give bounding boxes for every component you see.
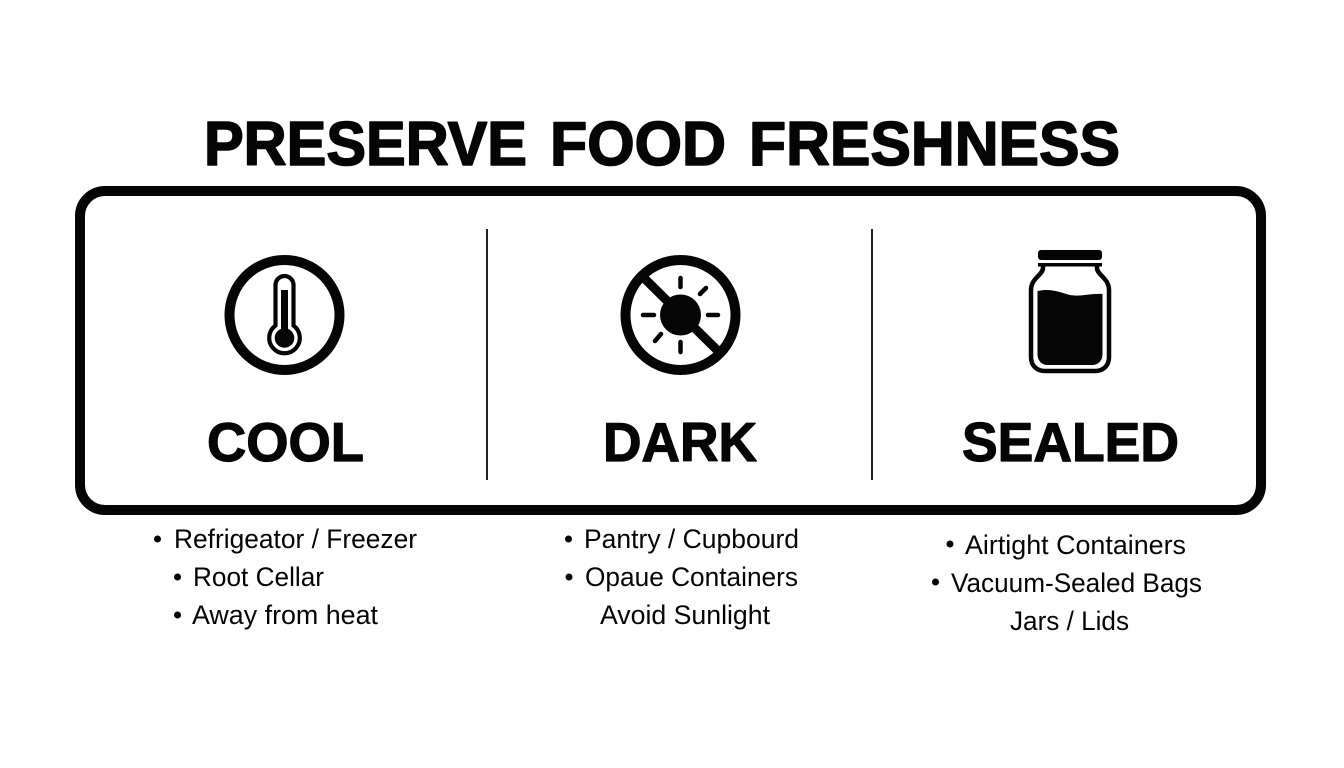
list: cool: Refrigeator / Freezer bbox=[174, 524, 417, 554]
list: sealed: Jars / Lids bbox=[1010, 606, 1129, 636]
title: FOOD bbox=[550, 110, 726, 179]
list: sealed bbox=[932, 530, 1202, 636]
title bbox=[204, 110, 1120, 179]
list: sealed: Vacuum-Sealed Bags bbox=[951, 568, 1202, 598]
list: cool: Root Cellar bbox=[193, 562, 324, 592]
panel: main frame bbox=[80, 191, 1261, 510]
icon: sealed jar bbox=[1031, 250, 1109, 371]
list: dark bbox=[565, 524, 799, 630]
title: PRESERVE bbox=[204, 110, 527, 179]
list: dark: Pantry / Cupbourd bbox=[584, 524, 799, 554]
list: cool bbox=[154, 524, 417, 630]
list: dark: Avoid Sunlight bbox=[600, 600, 770, 630]
heading: cool: COOL bbox=[207, 411, 364, 473]
icon: thermometer in circle bbox=[230, 260, 340, 370]
icon: crossed-out sun bbox=[626, 260, 736, 370]
list: sealed: Airtight Containers bbox=[965, 530, 1186, 560]
heading: dark: DARK bbox=[603, 411, 757, 473]
list: dark: Opaue Containers bbox=[585, 562, 798, 592]
list: cool: Away from heat bbox=[192, 600, 378, 630]
heading: sealed: SEALED bbox=[962, 411, 1179, 473]
title: FRESHNESS bbox=[749, 110, 1120, 179]
